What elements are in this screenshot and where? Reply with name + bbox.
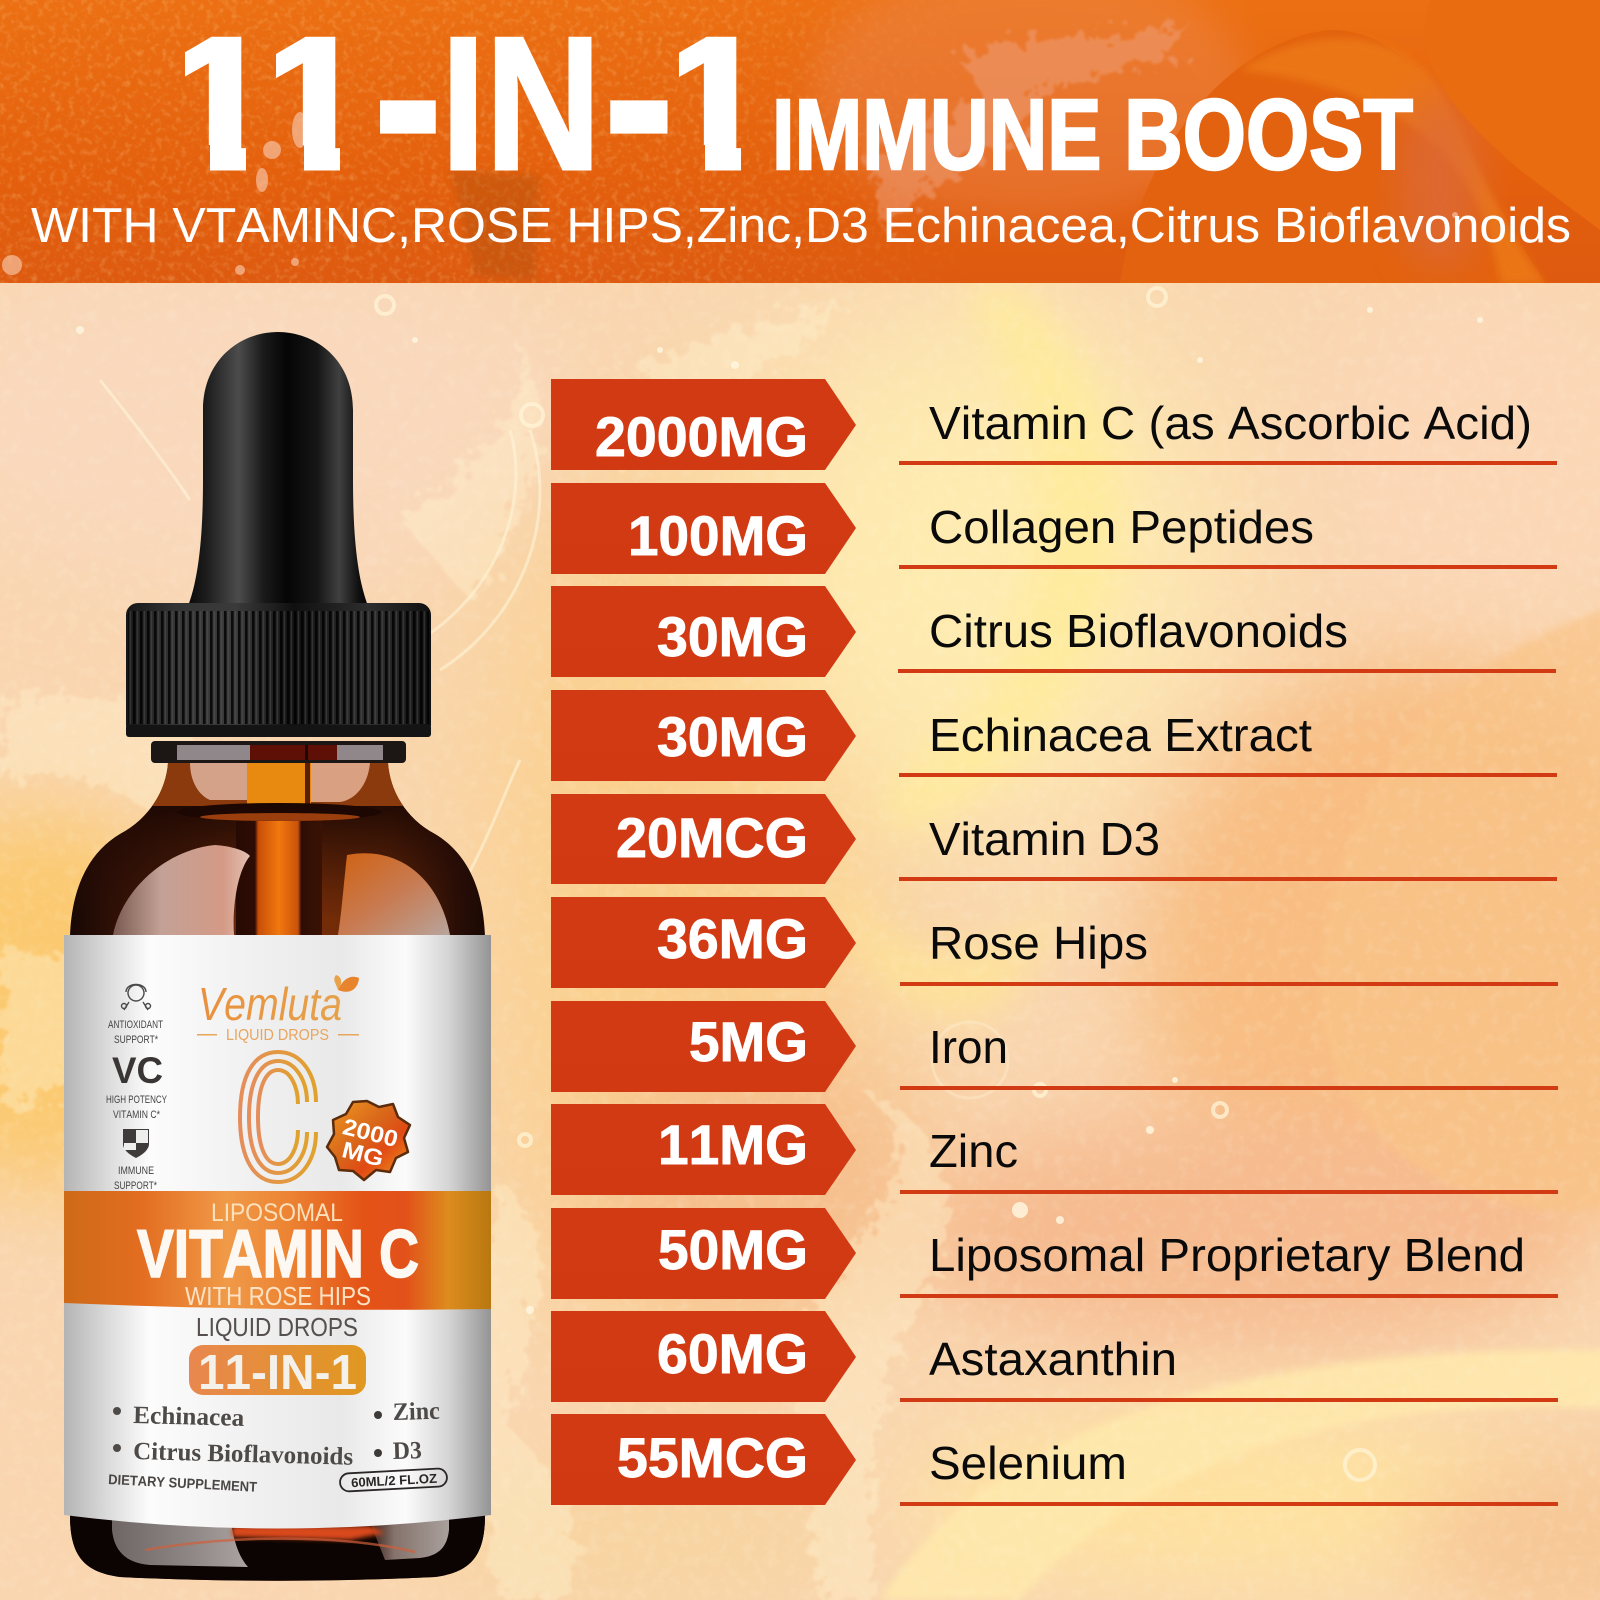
left claims column bbox=[106, 984, 167, 1192]
liposomal vitamin C bbox=[137, 1199, 419, 1311]
ingredient bullets: D3 bbox=[392, 1437, 422, 1465]
left claims column: ANTIOXIDANT bbox=[108, 1019, 163, 1031]
row: astaxanthin: 60MG bbox=[657, 1322, 808, 1385]
row: vitamin D3: 20MCG bbox=[616, 806, 808, 869]
liposomal vitamin C: LIPOSOMAL bbox=[211, 1199, 343, 1227]
badge: 2000 MG: 2000 bbox=[340, 1113, 401, 1152]
title: 11-IN-1 bbox=[185, 36, 741, 170]
icon: leaf bbox=[334, 975, 359, 992]
product bottle bbox=[60, 332, 500, 1590]
row: vitamin D3 bbox=[551, 794, 1557, 884]
row: rose hips: Rose Hips bbox=[929, 917, 1148, 969]
title: 11-IN-1: 1 bbox=[255, 0, 373, 210]
dietary supplement: DIETARY SUPPLEMENT bbox=[108, 1471, 258, 1495]
left claims column: SUPPORT* bbox=[114, 1034, 159, 1046]
ingredient bullets: Zinc bbox=[392, 1398, 440, 1426]
left claims column: HIGH POTENCY bbox=[106, 1094, 167, 1106]
row: echinacea: 30MG bbox=[657, 705, 808, 768]
icon: antioxidant figure bbox=[122, 984, 150, 1010]
row: liposomal blend: Liposomal Proprietary Blend bbox=[929, 1229, 1525, 1281]
label band bbox=[64, 1191, 491, 1310]
row: zinc bbox=[551, 1104, 1558, 1195]
row: iron bbox=[551, 1001, 1558, 1092]
row: astaxanthin: Astaxanthin bbox=[929, 1333, 1177, 1385]
row: citrus bbox=[551, 586, 1556, 677]
row: rose hips bbox=[551, 897, 1558, 988]
ingredient bullets bbox=[113, 1398, 440, 1471]
row: citrus: Citrus Bioflavonoids bbox=[929, 605, 1348, 657]
glass body bbox=[60, 750, 500, 1590]
ingredient table bbox=[551, 379, 1558, 1506]
row: collagen bbox=[551, 483, 1557, 574]
brand: Vemluta: Vemluta bbox=[198, 978, 342, 1030]
icon: large C bbox=[240, 1052, 316, 1182]
row: selenium: Selenium bbox=[929, 1437, 1127, 1489]
liposomal vitamin C: VITAMIN C bbox=[137, 1216, 419, 1292]
row: echinacea: Echinacea Extract bbox=[929, 709, 1312, 761]
row: collagen: Collagen Peptides bbox=[929, 501, 1314, 553]
ingredient bullets: Citrus Bioflavonoids bbox=[133, 1438, 354, 1471]
left claims column: VC bbox=[112, 1050, 163, 1091]
row: zinc: Zinc bbox=[929, 1125, 1018, 1177]
ingredient bullets: Echinacea bbox=[133, 1402, 245, 1432]
row: collagen: 100MG bbox=[628, 504, 808, 567]
row: iron: 5MG bbox=[689, 1010, 808, 1073]
row: vitamin C: 2000MG bbox=[595, 405, 808, 468]
row: rose hips: 36MG bbox=[657, 907, 808, 970]
row: iron: Iron bbox=[929, 1021, 1008, 1073]
row: liposomal blend bbox=[551, 1208, 1558, 1299]
title: 11-IN-1: 1 bbox=[656, 0, 774, 210]
row: vitamin C: Vitamin C (as Ascorbic Acid) bbox=[929, 397, 1532, 449]
collar ring bbox=[151, 741, 406, 763]
volume pill: 60ML/2 FL.OZ bbox=[351, 1471, 437, 1490]
row: liposomal blend: 50MG bbox=[658, 1218, 808, 1281]
left claims column: IMMUNE bbox=[118, 1165, 154, 1177]
liposomal vitamin C: WITH ROSE HIPS bbox=[185, 1281, 371, 1311]
bottle label bbox=[64, 935, 491, 1528]
badge: 2000 MG bbox=[327, 1101, 410, 1180]
11-IN-1 pill: 11-IN-1 bbox=[198, 1346, 357, 1400]
title: 11-IN-1: 1 bbox=[161, 0, 279, 210]
header banner background bbox=[0, 0, 1600, 283]
row: citrus: 30MG bbox=[657, 605, 808, 668]
subtitle: ingredients: WITH VTAMINC,ROSE HIPS,Zinc,D3 Echinacea,Citrus Bioflavonoids bbox=[31, 199, 1571, 253]
dropper bulb bbox=[188, 332, 368, 606]
badge: 2000 MG: MG bbox=[339, 1136, 386, 1172]
row: selenium: 55MCG bbox=[617, 1426, 808, 1489]
row: zinc: 11MG bbox=[658, 1113, 808, 1176]
liquid drops: LIQUID DROPS bbox=[196, 1312, 358, 1342]
row: selenium bbox=[551, 1414, 1558, 1506]
left claims column: SUPPORT* bbox=[114, 1180, 158, 1192]
volume pill bbox=[340, 1468, 447, 1492]
row: echinacea bbox=[551, 690, 1557, 781]
row: vitamin D3: Vitamin D3 bbox=[929, 813, 1160, 865]
row: vitamin C bbox=[551, 379, 1557, 470]
row: astaxanthin bbox=[551, 1311, 1558, 1402]
brand subline: LIQUID DROPS bbox=[226, 1027, 329, 1044]
left claims column: VITAMIN C* bbox=[113, 1109, 161, 1121]
dropper cap bbox=[126, 603, 431, 737]
title: 11-IN-1: IN bbox=[441, 0, 601, 210]
icon: shield bbox=[123, 1129, 149, 1158]
title: immune boost: IMMUNE BOOST bbox=[772, 79, 1413, 191]
